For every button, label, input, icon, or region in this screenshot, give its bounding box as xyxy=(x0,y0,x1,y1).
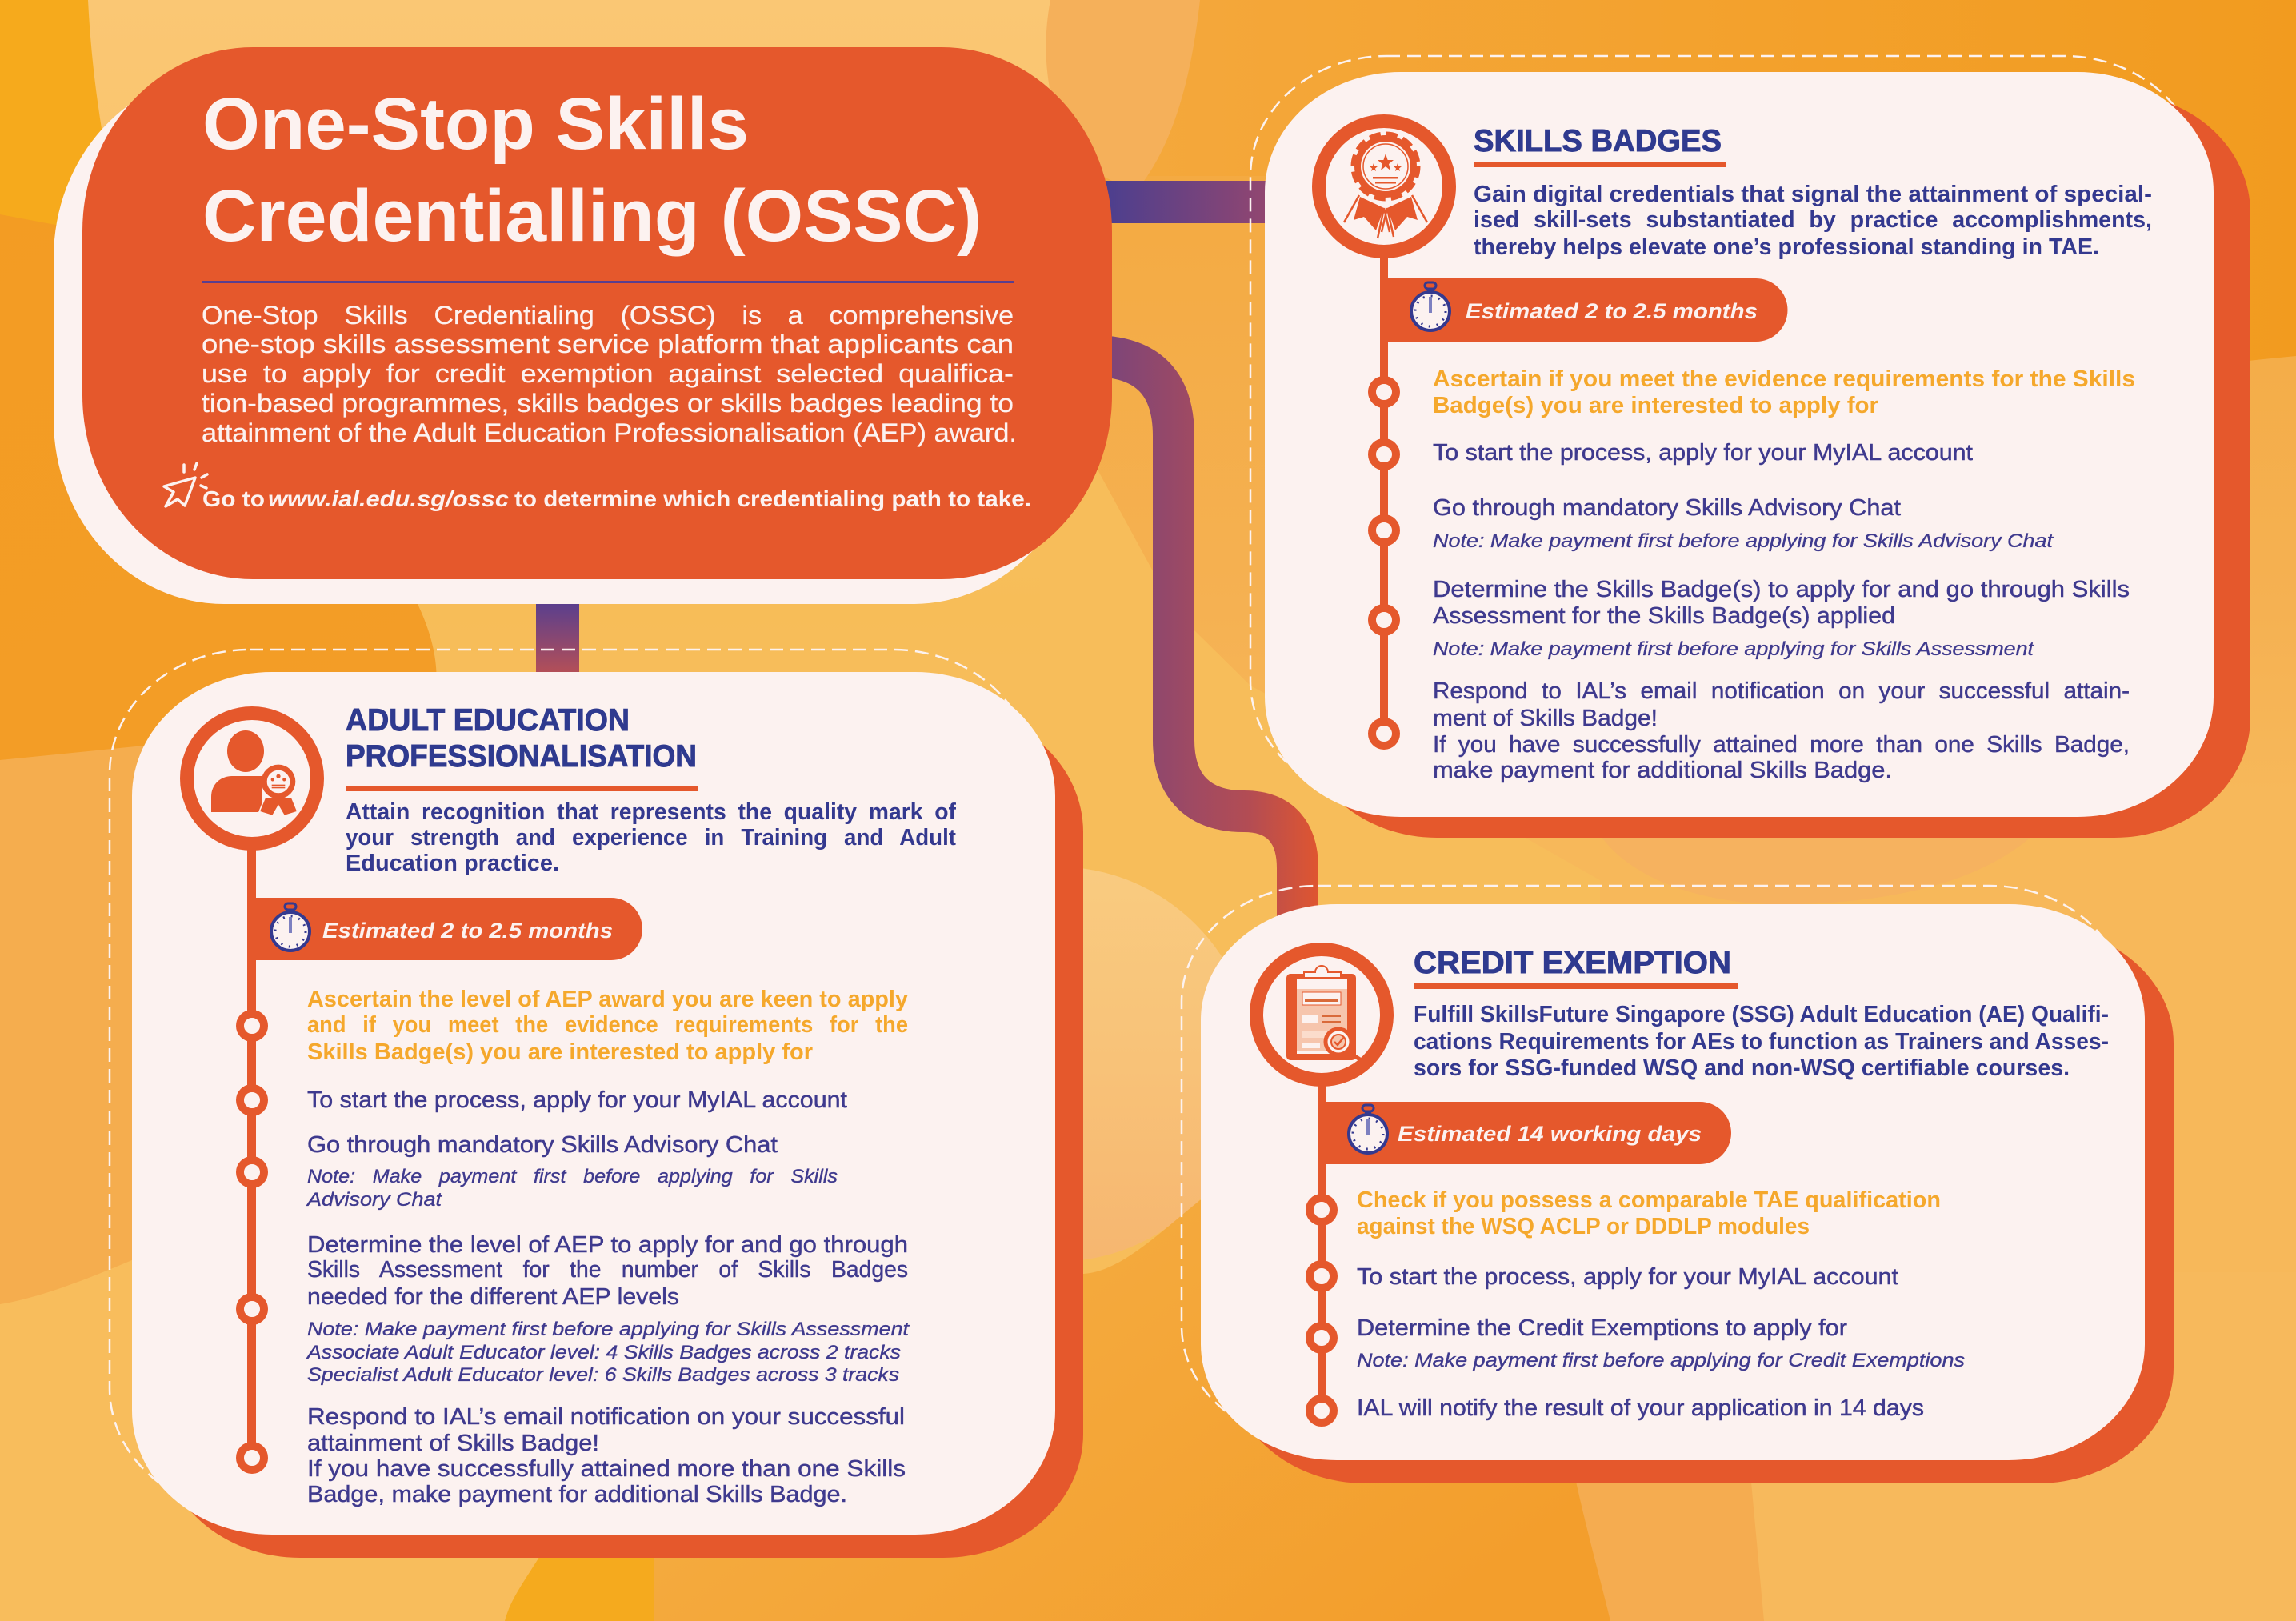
duration pill: Estimated 14 working days xyxy=(1398,1122,1702,1146)
card background xyxy=(1250,56,2250,838)
step 4 xyxy=(306,1232,910,1386)
step 4: Note: Make payment first before applying for Skills Assessment xyxy=(1433,638,2034,660)
step 3 xyxy=(306,1132,838,1211)
title: One-Stop Skills xyxy=(202,83,749,165)
title xyxy=(202,83,982,257)
icon: person with badge xyxy=(187,714,317,843)
step 5: make payment for additional Skills Badge. xyxy=(1433,758,1892,783)
timeline xyxy=(240,840,264,1470)
call to action: Go to xyxy=(202,486,265,511)
description: Fulfill SkillsFuture Singapore (SSG) Adult Education (AE) Qualifi- xyxy=(1414,1002,2109,1027)
duration pill xyxy=(1380,278,1787,342)
icon: clipboard xyxy=(1256,949,1387,1080)
step 3: Determine the Credit Exemptions to apply for xyxy=(1357,1315,1847,1341)
step 4: Determine the level of AEP to apply for and go through xyxy=(307,1232,908,1258)
connector: curved path to credit exemption xyxy=(1108,357,1298,920)
icon: stopwatch xyxy=(271,903,310,951)
description xyxy=(1474,182,2152,260)
title: Credentialling (OSSC) xyxy=(202,175,982,257)
step 5: If you have successfully attained more than one Skills Badge, xyxy=(1433,732,2130,758)
call to action xyxy=(202,486,1031,511)
step 3 xyxy=(1433,495,2054,552)
step 2: To start the process, apply for your MyIAL account xyxy=(1433,440,1973,466)
heading: ADULT EDUCATION xyxy=(346,703,630,738)
step 1: Ascertain the level of AEP award you are keen to apply xyxy=(307,987,908,1012)
step 4: needed for the different AEP levels xyxy=(307,1284,679,1310)
step 3 xyxy=(1357,1315,1965,1371)
step 4: Skills Assessment for the number of Skills Badges xyxy=(307,1257,908,1283)
step 1 xyxy=(1357,1187,1941,1239)
card background xyxy=(110,650,1083,1558)
description: your strength and experience in Training and Adult xyxy=(346,825,956,851)
icon: stopwatch xyxy=(1349,1105,1387,1153)
description: Attain recognition that represents the quality mark of xyxy=(346,799,956,825)
panel orange body xyxy=(82,47,1112,579)
intro paragraph: tion-based programmes, skills badges or skills badges leading to xyxy=(202,389,1014,418)
call to action: to determine which credentialing path to take. xyxy=(514,486,1031,511)
step 1: Check if you possess a comparable TAE qualification xyxy=(1357,1187,1941,1213)
icon: stopwatch xyxy=(1411,282,1450,330)
step 4: Assessment for the Skills Badge(s) applied xyxy=(1433,603,1895,629)
step 3: Go through mandatory Skills Advisory Chat xyxy=(307,1132,778,1158)
step 5 xyxy=(1433,678,2130,783)
heading: CREDIT EXEMPTION xyxy=(1414,946,1731,980)
panel: main intro xyxy=(54,47,1112,604)
step 4: IAL will notify the result of your application in 14 days xyxy=(1357,1395,1924,1421)
duration pill: Estimated 2 to 2.5 months xyxy=(322,919,613,943)
step 5: If you have successfully attained more than one Skills xyxy=(307,1456,906,1482)
description: Gain digital credentials that signal the attainment of special- xyxy=(1474,182,2152,207)
step 5: attainment of Skills Badge! xyxy=(307,1431,599,1456)
heading xyxy=(346,703,698,791)
step 2: To start the process, apply for your MyIAL account xyxy=(307,1087,847,1113)
step 3: Go through mandatory Skills Advisory Chat xyxy=(1433,495,1901,521)
duration pill xyxy=(247,898,642,960)
step 4: Specialist Adult Educator level: 6 Skills Badges across 3 tracks xyxy=(307,1364,899,1386)
step 5: Respond to IAL’s email notification on your successful attain- xyxy=(1433,678,2130,704)
duration pill xyxy=(1318,1102,1731,1164)
connector: top bar to skills badges xyxy=(1104,181,1268,223)
step 3: Note: Make payment first before applying for Credit Exemptions xyxy=(1357,1350,1965,1371)
description xyxy=(346,799,956,876)
panel: adult education professionalisation xyxy=(110,650,1083,1558)
panel white shadow xyxy=(54,74,1083,604)
panel: skills badges xyxy=(1250,56,2250,838)
step 3: Advisory Chat xyxy=(306,1189,442,1211)
description: ised skill-sets substantiated by practice accomplishments, xyxy=(1474,207,2152,233)
step 4: Note: Make payment first before applying for Skills Assessment xyxy=(307,1319,910,1340)
description xyxy=(1414,1002,2109,1081)
heading: SKILLS BADGES xyxy=(1474,124,1722,158)
call to action: www.ial.edu.sg/ossc xyxy=(268,486,509,511)
intro paragraph xyxy=(202,301,1017,447)
step 5 xyxy=(307,1404,906,1507)
description: thereby helps elevate one’s professional standing in TAE. xyxy=(1474,234,2099,260)
description: Education practice. xyxy=(346,851,559,876)
step 3: Note: Make payment first before applying for Skills Advisory Chat xyxy=(1433,530,2054,552)
step 4: Determine the Skills Badge(s) to apply for and go through Skills xyxy=(1433,577,2130,602)
step 1: and if you meet the evidence requirements for the xyxy=(307,1012,908,1038)
intro paragraph: one-stop skills assessment service platform that applicants can xyxy=(202,330,1014,358)
intro paragraph: One-Stop Skills Credentialing (OSSC) is a comprehensive xyxy=(202,301,1014,330)
timeline xyxy=(1310,1072,1334,1423)
step 1: Badge(s) you are interested to apply for xyxy=(1433,393,1878,418)
icon: cursor click xyxy=(164,463,207,506)
description: sors for SSG-funded WSQ and non-WSQ certifiable courses. xyxy=(1414,1055,2070,1081)
step 1: Skills Badge(s) you are interested to apply for xyxy=(307,1039,813,1065)
timeline xyxy=(1372,248,1396,746)
intro paragraph: use to apply for credit exemption against selected qualifica- xyxy=(202,359,1014,388)
connector: main panel to adult education xyxy=(536,600,579,674)
description: cations Requirements for AEs to function as Trainers and Asses- xyxy=(1414,1029,2109,1055)
step 5: ment of Skills Badge! xyxy=(1433,706,1658,731)
step 3: Note: Make payment first before applying for Skills xyxy=(307,1166,838,1187)
step 1: Ascertain if you meet the evidence requirements for the Skills xyxy=(1433,366,2135,392)
panel: credit exemption xyxy=(1182,886,2174,1483)
step 5: Badge, make payment for additional Skills Badge. xyxy=(307,1482,847,1507)
card background xyxy=(1182,886,2174,1483)
icon: medal xyxy=(1318,122,1450,251)
step 4: Associate Adult Educator level: 4 Skills Badges across 2 tracks xyxy=(306,1342,901,1363)
intro paragraph: attainment of the Adult Education Professionalisation (AEP) award. xyxy=(202,418,1017,447)
step 1 xyxy=(1433,366,2135,418)
heading: PROFESSIONALISATION xyxy=(346,739,697,774)
duration pill: Estimated 2 to 2.5 months xyxy=(1466,299,1758,323)
step 2: To start the process, apply for your MyIAL account xyxy=(1357,1264,1898,1290)
step 1: against the WSQ ACLP or DDDLP modules xyxy=(1357,1214,1810,1239)
step 4 xyxy=(1433,577,2130,660)
step 5: Respond to IAL’s email notification on your successful xyxy=(307,1404,905,1430)
step 1 xyxy=(307,987,908,1065)
